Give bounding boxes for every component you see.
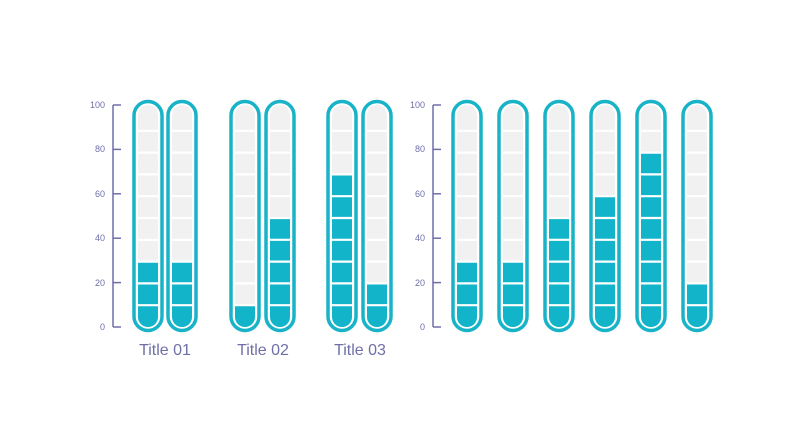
tube 12 (20) [683, 102, 711, 330]
axis labels: left: 60 [95, 189, 105, 199]
title 02: Title 02 [237, 342, 289, 359]
axis: right [433, 105, 441, 327]
axis labels: left: 40 [95, 233, 105, 243]
title 01: Title 01 [139, 342, 191, 359]
title 03: Title 03 [334, 342, 386, 359]
tube 6 (20) [363, 102, 391, 330]
tube 2 (30) [168, 102, 196, 330]
axis labels: right: 0 [420, 322, 425, 332]
axis labels: right: 100 [410, 100, 425, 110]
axis labels: right: 60 [415, 189, 425, 199]
tube 3 (10) [231, 102, 259, 330]
tube 9 (50) [545, 102, 573, 330]
tube 4 (50) [266, 102, 294, 330]
tube 8 (30) [499, 102, 527, 330]
axis labels: left: 20 [95, 278, 105, 288]
axis labels: left: 0 [100, 322, 105, 332]
tube 7 (30) [453, 102, 481, 330]
tube 5 (70) [328, 102, 356, 330]
tube 10 (60) [591, 102, 619, 330]
tube 11 (80) [637, 102, 665, 330]
axis labels: left [90, 100, 105, 332]
axis labels: right [410, 100, 425, 332]
axis: left [113, 105, 121, 327]
axis labels: right: 40 [415, 233, 425, 243]
axis labels: right: 20 [415, 278, 425, 288]
axis labels: left: 100 [90, 100, 105, 110]
axis labels: left: 80 [95, 144, 105, 154]
axis labels: right: 80 [415, 144, 425, 154]
tube 1 (30) [134, 102, 162, 330]
